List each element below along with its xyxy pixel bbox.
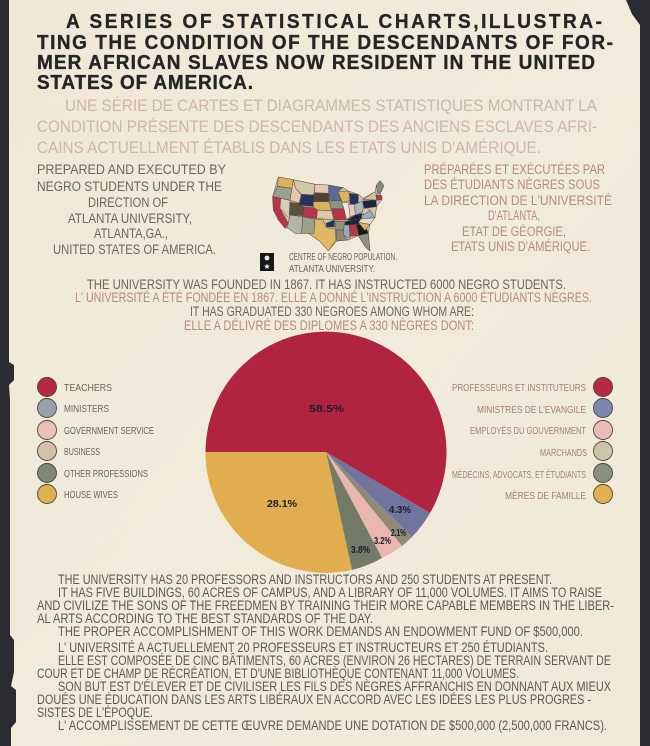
- text block: prepared by, French: D'ATLANTA,: [488, 208, 540, 223]
- French subtitle: CAINS ACTUELLMENT ÉTABLIS DANS LES ETATS UNIS D'AMÉRIQUE.: [37, 138, 541, 157]
- legend: English: HOUSE WIVES: [64, 489, 118, 501]
- title: STATES OF AMERICA.: [37, 72, 253, 94]
- legend: French: [452, 378, 612, 504]
- legend: English: BUSINESS: [64, 446, 100, 458]
- text block: prepared by, French: PRÉPARÉES ET EXÉCUTÉES PAR: [424, 162, 605, 177]
- legend: English: TEACHERS: [64, 382, 112, 394]
- legend: French: PROFESSEURS ET INSTITUTEURS: [452, 382, 586, 394]
- legend: English: [38, 378, 154, 504]
- pie chart: [205, 332, 446, 573]
- slice: house wives 28.1%: [205, 452, 352, 573]
- text block: prepared by, French: LA DIRECTION DE L'UNIVERSITÉ: [424, 193, 612, 208]
- label: 3.8%: 3.8%: [351, 545, 370, 556]
- slice: business 2.1%: [326, 452, 412, 546]
- text block: prepared by, English: [37, 162, 226, 257]
- icon: centre of population marker: [260, 253, 274, 271]
- map legend text: CENTRE OF NEGRO POPULATION.: [289, 251, 397, 263]
- slice: teachers 58.5%: [206, 332, 446, 513]
- text block: French description: SISTES DE L'ÉPOQUE.: [37, 705, 153, 720]
- text block: university summary: IT HAS GRADUATED 330 NEGROES AMONG WHOM ARE:: [190, 304, 474, 319]
- legend: French: EMPLOYÉS DU GOUVERNMENT: [470, 424, 586, 437]
- text block: prepared by, English: ATLANTA,GA.,: [94, 226, 168, 241]
- French subtitle: [37, 96, 597, 157]
- text block: prepared by, English: PREPARED AND EXECUTED BY: [37, 162, 226, 177]
- label: 28.1%: 28.1%: [267, 499, 297, 510]
- text block: prepared by, French: ETAT DE GÉORGIE,: [462, 224, 566, 239]
- label: 4.3%: 4.3%: [389, 505, 411, 516]
- slice: ministers 4.3%: [326, 452, 430, 537]
- title: [37, 11, 613, 94]
- slice: government service 3.2%: [326, 452, 402, 558]
- title: A SERIES OF STATISTICAL CHARTS,ILLUSTRA-: [66, 11, 602, 33]
- map legend text: ATLANTA UNIVERSITY.: [289, 263, 375, 275]
- text block: prepared by, English: DIRECTION OF: [88, 195, 168, 210]
- legend: English: OTHER PROFESSIONS: [64, 468, 148, 480]
- text block: university summary: ELLE A DÉLIVRÉ DES DIPLOMES A 330 NÈGRES DONT:: [184, 318, 474, 333]
- text block: French description: [37, 640, 611, 733]
- title: MER AFRICAN SLAVES NOW RESIDENT IN THE UNITED: [37, 52, 595, 74]
- legend: French: MINISTRES DE L'EVANGILE: [477, 404, 586, 416]
- label: 3.2%: 3.2%: [374, 536, 391, 547]
- French subtitle: UNE SÉRIE DE CARTES ET DIAGRAMMES STATISTIQUES MONTRANT LA: [65, 96, 597, 115]
- legend: English: GOVERNMENT SERVICE: [64, 425, 154, 437]
- text block: French description: COUR ET DE CHAMP DE RÉCRÉATION, ET D'UNE BIBLIOTHÈQUE CONTENANT 11,000 VOLUMES.: [37, 666, 519, 681]
- text block: French description: L' UNIVERSITÉ A ACTUELLEMENT 20 PROFESSEURS ET INSTRUCTEURS ET 250 ÉTUDIANTS.: [58, 640, 548, 655]
- text block: prepared by, English: ATLANTA UNIVERSITY,: [68, 211, 192, 226]
- legend: French: MARCHANDS: [540, 447, 587, 459]
- map legend text: [289, 251, 397, 275]
- French subtitle: CONDITION PRÉSENTE DES DESCENDANTS DES ANCIENS ESCLAVES AFRI-: [37, 117, 597, 136]
- text block: prepared by, French: DES ÉTUDIANTS NÈGRES SOUS: [424, 177, 600, 192]
- label: 58.5%: 58.5%: [309, 404, 344, 415]
- text block: university summary: [75, 277, 592, 333]
- legend: French: MÈRES DE FAMILLE: [505, 489, 586, 502]
- legend: French: MÉDECINS, ADVOCATS, ET ÉTUDIANTS: [452, 468, 586, 481]
- map of the United States: [273, 177, 384, 251]
- text block: prepared by, French: [424, 162, 612, 254]
- label: 2.1%: 2.1%: [391, 528, 406, 539]
- text block: prepared by, French: ETATS UNIS D'AMÉRIQUE.: [451, 239, 590, 254]
- text block: prepared by, English: UNITED STATES OF AMERICA.: [53, 242, 216, 257]
- text block: English description: AL ARTS ACCORDING TO THE BEST STANDARDS OF THE DAY.: [37, 611, 373, 626]
- legend: English: MINISTERS: [64, 403, 109, 415]
- text block: university summary: THE UNIVERSITY WAS FOUNDED IN 1867. IT HAS INSTRUCTED 6000 NEGRO STUDENTS.: [87, 277, 566, 292]
- title: TING THE CONDITION OF THE DESCENDANTS OF FOR-: [37, 32, 613, 54]
- slice: other professions 3.8%: [326, 452, 382, 570]
- text block: English description: [37, 572, 614, 639]
- text block: prepared by, English: NEGRO STUDENTS UNDER THE: [37, 179, 222, 194]
